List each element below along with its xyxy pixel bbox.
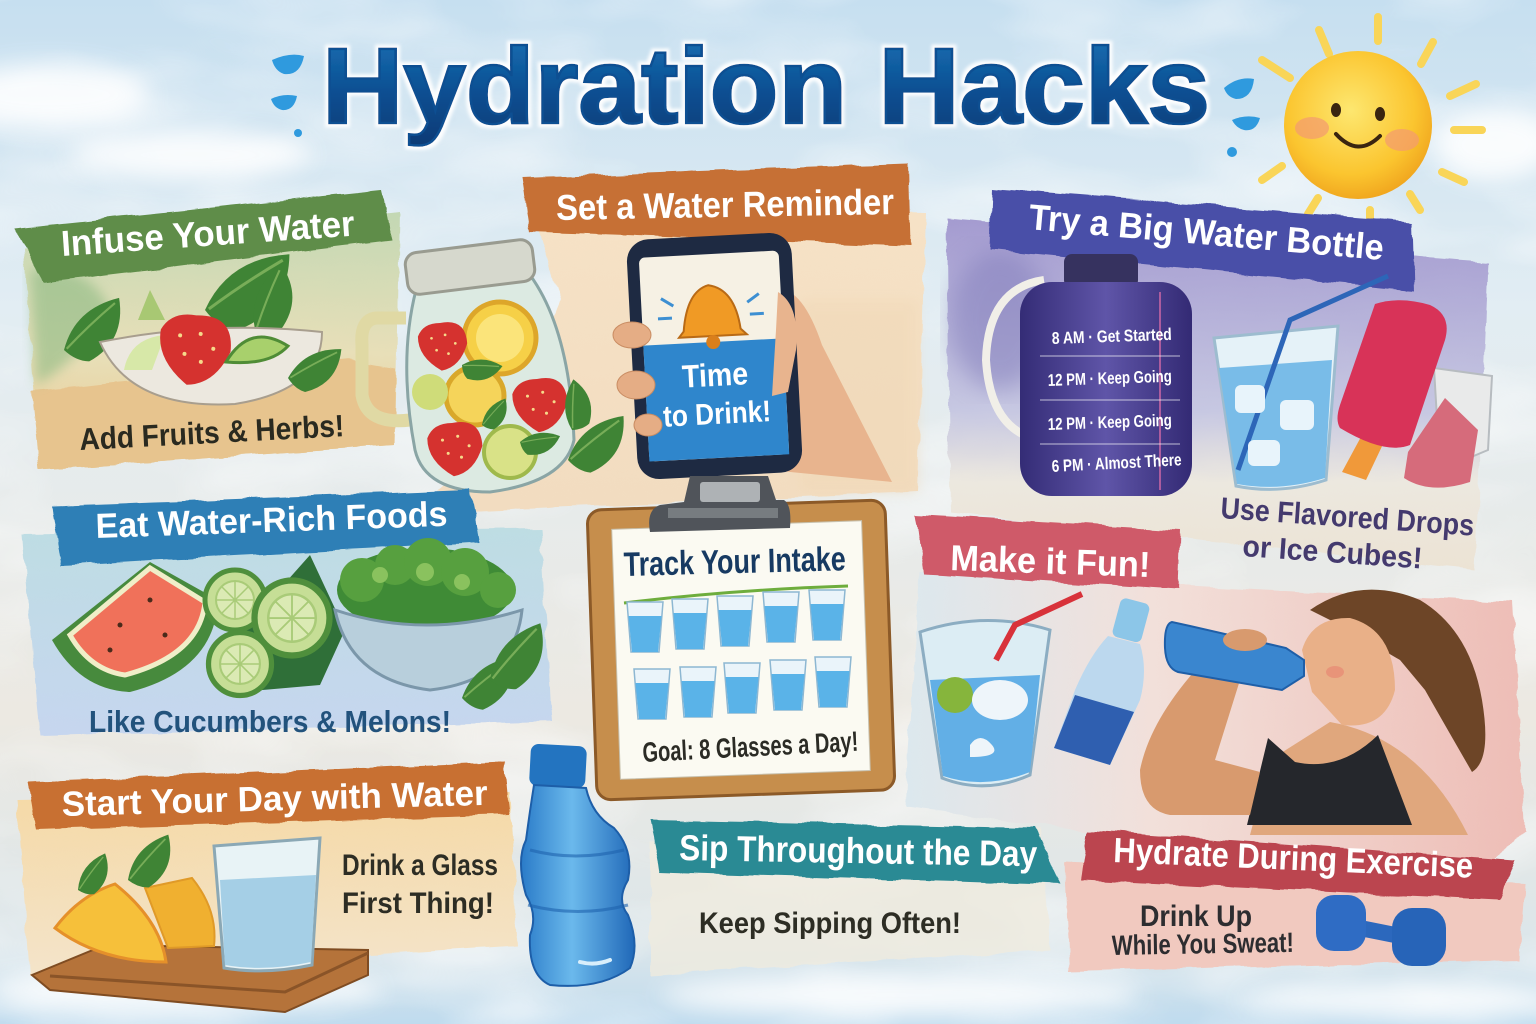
icon: bowl of greens — [335, 538, 563, 715]
heading banner: Set a Water Reminder — [556, 181, 894, 228]
heading banner — [52, 490, 480, 565]
caption — [1220, 492, 1475, 576]
panel: set a water reminder — [410, 164, 926, 514]
icon: marked water jug: 8 AM · Get Started — [1051, 325, 1172, 348]
icon: big blue water bottle — [521, 744, 635, 986]
heading banner: Infuse Your Water — [60, 203, 356, 264]
title: Hydration Hacks — [322, 25, 1210, 146]
caption: Use Flavored Drops — [1220, 492, 1475, 543]
caption — [1112, 900, 1294, 961]
heading banner — [916, 514, 1180, 590]
panel: infuse your water — [14, 190, 400, 470]
heading banner — [990, 188, 1414, 290]
panel: make it fun and exercise — [905, 514, 1525, 880]
icon: cutting board with lemons — [32, 833, 368, 1012]
heading banner: Sip Throughout the Day — [679, 827, 1038, 874]
icon: marked water jug: 6 PM · Almost There — [1051, 450, 1182, 476]
heading banner: Try a Big Water Bottle — [1027, 196, 1386, 268]
panel: hydrate during exercise — [1065, 830, 1525, 972]
panel: start your day with water — [16, 762, 518, 1012]
caption: Keep Sipping Often! — [699, 907, 961, 940]
caption — [342, 849, 498, 920]
icon: glass with ice and straw — [1214, 276, 1388, 489]
caption: Drink Up — [1140, 900, 1252, 933]
heading banner — [650, 820, 1062, 885]
icon: clip — [649, 476, 790, 532]
caption: Drink a Glass — [342, 849, 498, 882]
icon: marked water jug — [986, 254, 1192, 496]
heading banner: Make it Fun! — [950, 537, 1151, 585]
caption: or Ice Cubes! — [1242, 530, 1423, 576]
heading banner: Eat Water-Rich Foods — [95, 495, 448, 546]
icon: hand holding phone — [613, 232, 892, 482]
icon: small bottle — [1054, 597, 1151, 765]
icon: marked water jug: 12 PM · Keep Going — [1047, 411, 1172, 434]
water glasses grid — [627, 590, 851, 719]
caption: While You Sweat! — [1112, 927, 1294, 961]
icon: popsicle and ice cube — [1338, 300, 1492, 488]
icon: glass of water — [214, 838, 320, 971]
icon: water splashes — [271, 55, 1260, 157]
heading banner: Start Your Day with Water — [61, 774, 488, 824]
icon: marked water jug: 12 PM · Keep Going — [1047, 367, 1172, 390]
caption: Like Cucumbers & Melons! — [89, 704, 451, 739]
icon: watermelon and cucumbers — [52, 555, 345, 696]
caption: First Thing! — [342, 887, 494, 920]
caption: Add Fruits & Herbs! — [79, 408, 345, 457]
panel: sip throughout the day — [650, 820, 1062, 975]
icon: infused mason jar — [362, 238, 638, 492]
icon: hand holding phone: to Drink! — [662, 395, 772, 434]
panel: try a big water bottle — [946, 188, 1492, 576]
icon: dumbbell — [1316, 895, 1446, 966]
icon: smiling sun — [1262, 17, 1482, 226]
heading: Track Your Intake — [623, 540, 846, 584]
icon: woman drinking — [1140, 590, 1485, 835]
icon: fizzy glass — [920, 594, 1082, 786]
panel: eat water-rich foods — [22, 490, 563, 739]
icon: bowl of fruit and herbs — [53, 252, 348, 404]
icon: bell — [676, 283, 748, 351]
icon: hand holding phone: Time — [681, 355, 749, 395]
heading banner — [14, 190, 392, 282]
heading banner — [522, 164, 910, 246]
heading banner: Hydrate During Exercise — [1113, 831, 1474, 886]
caption: Goal: 8 Glasses a Day! — [642, 726, 859, 768]
heading banner — [28, 762, 510, 830]
panel: track your intake clipboard — [587, 476, 895, 800]
